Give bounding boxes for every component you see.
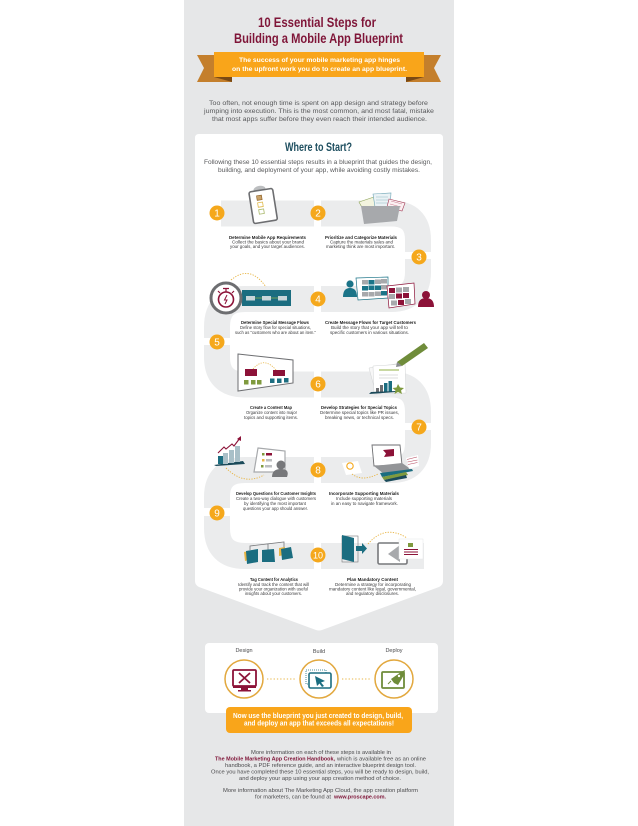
step 4 text (325, 320, 416, 336)
icon: laptop, books and at sign (342, 445, 419, 482)
footer text: More information on each of these steps is available in (251, 750, 391, 756)
ribbon banner: The success of your mobile marketing app hinges (239, 57, 400, 64)
dotted connectors (267, 678, 371, 680)
step number badges: 5 (214, 338, 220, 349)
step number badges: 7 (416, 423, 422, 434)
step 9 text: Identify and track the content that will (238, 582, 309, 588)
phase labels: Deploy (385, 648, 403, 654)
icon: stopwatch and message flow (211, 273, 291, 313)
step number badges: 6 (315, 380, 321, 391)
step 4 text: Create Message Flows for Target Customers (325, 320, 416, 326)
icon: clipboard (248, 184, 278, 224)
step 5 content map text: Organize content into major (246, 410, 297, 416)
step 5 text: Determine Special Message Flows (241, 320, 309, 326)
step 1 text: Collect the basics about your brand (232, 240, 304, 246)
icon: customers and message grids (343, 277, 434, 308)
icon: door and tablet with document (342, 532, 423, 564)
icon: folder with papers (359, 193, 405, 224)
callout: use the blueprint: Now use the blueprint you just created to design, build, (233, 711, 403, 720)
step 4 text: Build the story that your app will tell to (331, 325, 408, 331)
footer text: The Mobile Marketing App Creation Handbook, (215, 756, 335, 762)
step 5 text: Define story flow for special situations, (240, 325, 311, 331)
heading: where to start: Where to Start? (285, 142, 352, 154)
step number badges: 2 (315, 209, 321, 220)
step 9 text: insights about your customers. (245, 591, 302, 597)
step 2 text: marketing think are most important. (326, 244, 395, 250)
icon: document, pencil and chart (369, 343, 428, 394)
step 7 text: in an easy to navigate framework. (331, 501, 398, 507)
step number badges: 9 (214, 509, 220, 520)
card introduction (204, 159, 432, 174)
card introduction: building, and deployment of your app, while avoiding costly mistakes. (218, 167, 420, 174)
intro paragraph (203, 100, 434, 123)
step 7 text: Include supporting materials (336, 496, 393, 502)
step number badges (210, 206, 426, 562)
step 8 question text (236, 491, 316, 512)
icon: build cursor (300, 660, 338, 698)
icon: content map (238, 354, 293, 391)
panel: where to start card (195, 134, 443, 630)
step number badges: 10 (313, 551, 323, 561)
step 5 content map text (244, 405, 298, 421)
step 5 content map text: Create a Content Map (250, 405, 292, 411)
step 10 text: Determine a strategy for incorporating (335, 582, 411, 588)
step 6 text: Develop Strategies for Special Topics (321, 405, 397, 411)
step 6 text: breaking news, or technical specs. (325, 415, 394, 421)
ribbon banner: on the upfront work you do to create an app blueprint. (232, 66, 407, 73)
step 5 content map text: topics and supporting items. (244, 415, 298, 421)
step number badges: 8 (315, 466, 321, 477)
phase labels (235, 648, 403, 655)
step 10 text: and regulatory disclosures. (346, 591, 399, 597)
step number badges: 1 (214, 209, 220, 220)
ribbon banner (197, 52, 441, 82)
intro paragraph: Too often, not enough time is spent on app design and strategy before (209, 100, 428, 107)
step 2 text: Capture the materials sales and (330, 240, 393, 246)
callout: use the blueprint: and deploy an app that exceeds all expectations! (244, 718, 394, 728)
winding path (200, 195, 436, 575)
footer text: More information about The Marketing App Cloud, the app creation platform (223, 788, 418, 794)
intro paragraph: jumping into execution. This is the most common, and most fatal, mistake (203, 108, 434, 115)
title (234, 14, 403, 46)
step 2 text (325, 235, 397, 250)
step 4 text: specific customers in various situations. (330, 330, 409, 336)
icon: deploy tablet (375, 660, 413, 698)
step 1 text: Determine Mobile App Requirements (229, 235, 306, 241)
step 5 text: such as "customers who are about an item." (235, 330, 316, 336)
step 9 text (238, 577, 309, 597)
footer text: which is available free as an online (336, 756, 426, 762)
footer text: handbook, a PDF reference guide, and an interactive blueprint design tool. (225, 763, 416, 769)
step 10 text: mandatory content like legal, governmental, (329, 586, 416, 592)
title: Building a Mobile App Blueprint (234, 30, 403, 46)
step 7 text (329, 491, 399, 507)
step 7 text: Incorporate Supporting Materials (329, 491, 399, 497)
step 5 text (235, 320, 316, 336)
icon: analytics chart and survey card (214, 436, 288, 479)
title: 10 Essential Steps for (258, 14, 376, 30)
phase labels: Build (313, 649, 325, 655)
step 8 question text: Develop Questions for Customer Insights (236, 491, 316, 497)
panel: design build deploy (205, 643, 438, 713)
step 2 text: Prioritize and Categorize Materials (325, 235, 397, 241)
step 10 text (329, 577, 416, 597)
phase labels: Design (235, 648, 253, 654)
footer text: for marketers, can be found at (255, 794, 331, 800)
step 6 text: Determine special topics like PR issues, (320, 410, 399, 416)
step 9 text: provide your organization with useful (239, 586, 308, 592)
step 10 text: Plan Mandatory Content (347, 577, 398, 583)
card introduction: Following these 10 essential steps results in a blueprint that guides the design, (204, 159, 432, 166)
step 9 text: Tag Content for Analytics (250, 577, 298, 583)
step number badges: 3 (416, 253, 422, 264)
icon: design monitor (225, 660, 263, 698)
footer text: and deploy your app using your app creation method of choice. (239, 776, 401, 782)
step 6 text (320, 405, 399, 421)
icon: tagged content (244, 542, 293, 564)
step number badges: 4 (315, 295, 321, 306)
background panel (184, 0, 454, 826)
footer text: Once you have completed these 10 essential steps, you will be ready to design, build, (211, 770, 429, 776)
callout: use the blueprint (226, 707, 412, 733)
step 8 question text: questions your app should answer. (243, 506, 308, 512)
step 8 question text: Create a two-way dialogue with customers (236, 496, 316, 502)
footer text (211, 750, 429, 800)
intro paragraph: that most apps suffer before they even reach their intended audience. (212, 116, 427, 123)
step 1 text: your goals, and your target audiences. (230, 244, 305, 250)
footer text: www.proscape.com. (333, 794, 386, 800)
step 1 text (229, 235, 306, 250)
step 8 question text: by identifying the most important (244, 501, 307, 507)
